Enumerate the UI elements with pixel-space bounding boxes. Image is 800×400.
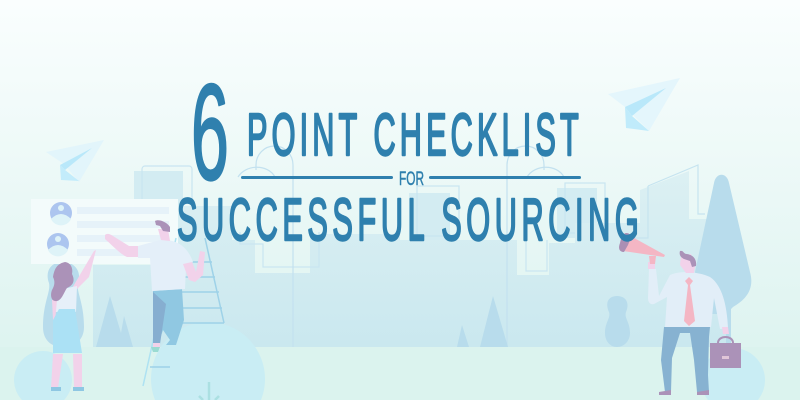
title xyxy=(177,56,639,253)
divider right xyxy=(429,176,581,179)
ground xyxy=(0,347,800,400)
ladder xyxy=(143,238,224,386)
bushes xyxy=(14,322,765,400)
word: for: FOR xyxy=(399,169,424,190)
profile board xyxy=(31,199,178,264)
city skyline xyxy=(93,165,731,347)
man on ladder xyxy=(105,220,205,352)
divider left xyxy=(241,176,393,179)
heading: successful sourcing: SUCCESSFUL SOURCING xyxy=(177,186,639,253)
man with megaphone xyxy=(648,251,741,395)
paper plane right xyxy=(608,78,680,131)
trees and hills xyxy=(43,175,751,347)
paper plane left xyxy=(46,140,104,182)
megaphone xyxy=(619,233,665,257)
bush stem xyxy=(199,382,219,400)
woman xyxy=(51,250,96,391)
heading: point checklist: POINT CHECKLIST xyxy=(247,101,579,168)
numeral 6: 6 xyxy=(191,56,229,208)
street lamps xyxy=(238,146,564,347)
